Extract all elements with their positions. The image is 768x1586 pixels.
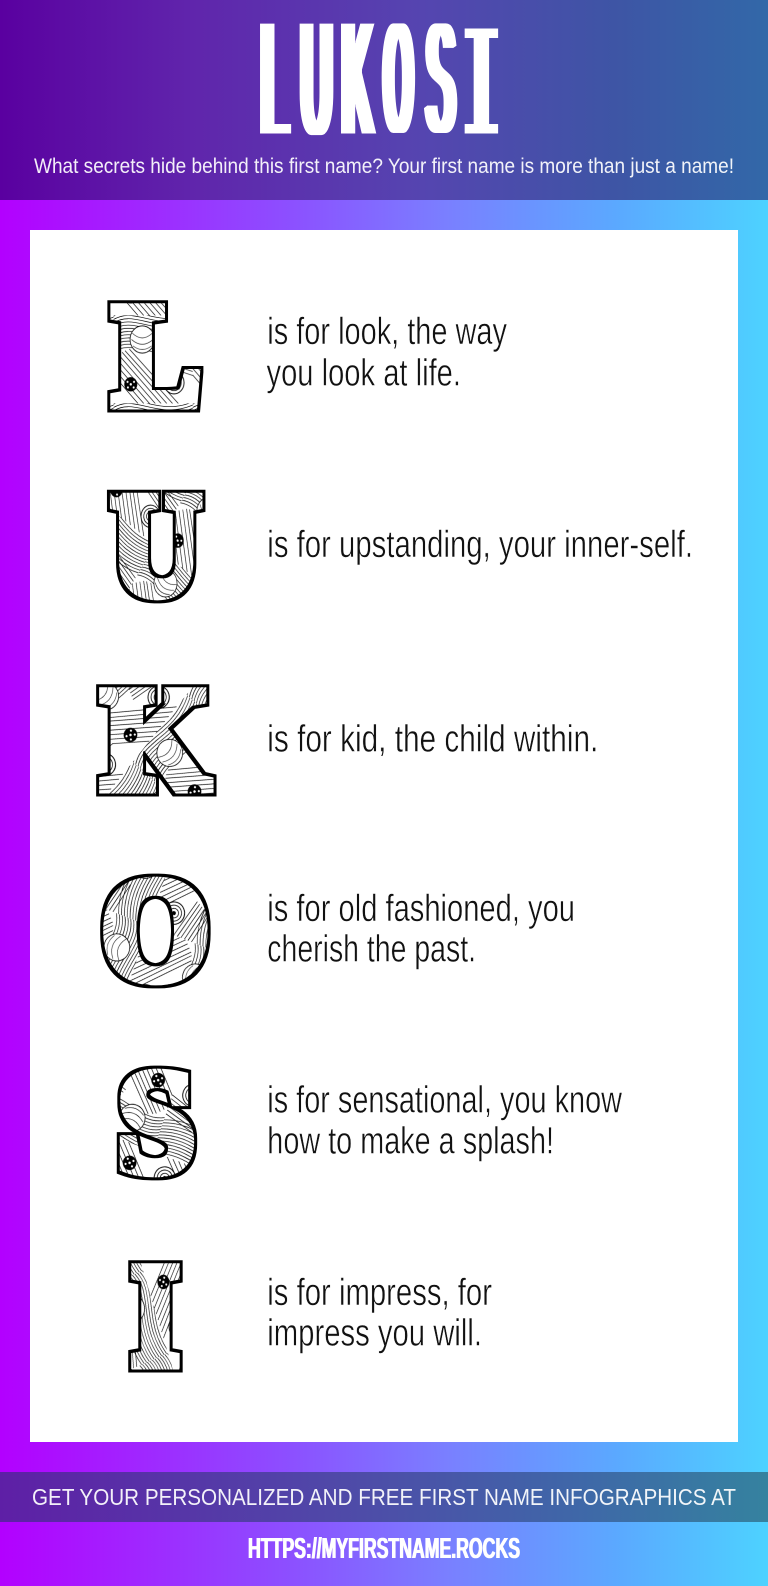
icon: patterned letter S: S: [118, 1043, 194, 1202]
icon: patterned letter K: K: [102, 660, 209, 819]
row: letter L: [114, 275, 507, 435]
text: S meaning: how to make a splash!: [267, 1120, 554, 1162]
text: I meaning: impress you will.: [267, 1313, 482, 1355]
icon: patterned letter I: I: [132, 1235, 179, 1395]
text: L meaning: is for look, the way: [267, 311, 507, 353]
icon: patterned letter U: U: [112, 465, 200, 624]
footer band: [0, 1472, 768, 1522]
text: L meaning: you look at life.: [266, 352, 461, 394]
text: O meaning: cherish the past.: [267, 928, 476, 970]
text: O meaning: is for old fashioned, you: [267, 888, 575, 930]
icon: patterned letter O: O: [102, 851, 209, 1010]
row: letter O: [102, 851, 575, 1010]
row: letter I: [132, 1235, 492, 1395]
panel: letters and meanings: [30, 230, 738, 1442]
icon: patterned letter L: L: [114, 275, 200, 435]
row: letter S: [118, 1043, 622, 1202]
row: letter U: [112, 465, 693, 624]
title: [261, 0, 499, 184]
text: K meaning: is for kid, the child within.: [267, 718, 598, 760]
footer url: HTTPS://MYFIRSTNAME.ROCKS: [248, 1533, 520, 1565]
text: I meaning: is for impress, for: [267, 1272, 492, 1314]
row: letter K: [102, 660, 598, 819]
title: I: [464, 0, 499, 184]
text: S meaning: is for sensational, you know: [267, 1080, 622, 1122]
header band: [0, 0, 768, 200]
